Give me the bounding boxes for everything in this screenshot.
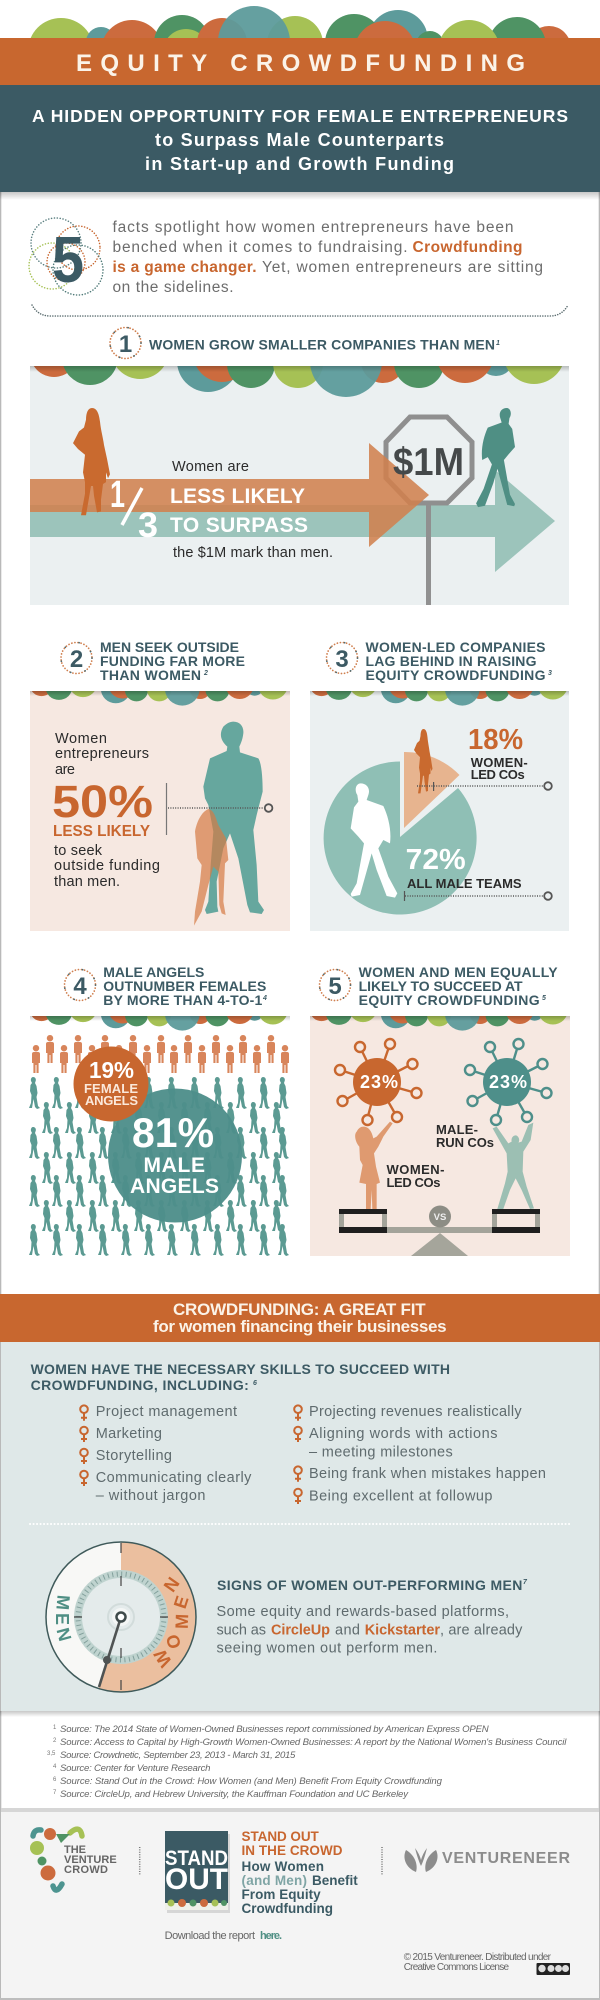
intro text: on the sidelines.	[112, 279, 234, 296]
subtitle banner: in Start-up and Growth Funding	[145, 154, 454, 174]
icon: man silhouette	[476, 408, 515, 507]
intro: five facts	[29, 218, 543, 296]
heading 5: LIKELY TO SUCCEED AT	[359, 978, 523, 994]
text: women entrepreneurs are: are	[55, 762, 75, 778]
stop sign outline	[386, 417, 472, 605]
text: women entrepreneurs are	[55, 731, 149, 778]
icon: orange burst 23 percent	[335, 1039, 422, 1125]
intro text: Yet, women entrepreneurs are sitting	[262, 259, 543, 276]
label: women: O	[162, 1632, 185, 1651]
icon: woman lifting	[355, 1122, 393, 1209]
logo: the venture crowd: CROWD	[64, 1864, 108, 1876]
label: women-led cos: LED COs	[471, 767, 525, 782]
number badge 5	[320, 970, 350, 1000]
number badge 3	[326, 642, 358, 674]
logo: the venture crowd	[30, 1828, 117, 1890]
text: to seek outside funding	[54, 843, 160, 890]
list: skills right column: Aligning words with actions	[309, 1426, 498, 1442]
heading 3: WOMEN-LED COMPANIES	[366, 639, 546, 655]
panel 3: women-led companies lag	[310, 670, 569, 931]
number badge 1	[110, 328, 141, 358]
circle: 81 percent male angels: 81%	[132, 1109, 214, 1156]
heading 3	[326, 639, 552, 683]
footnotes: Source: Center for Venture Research	[60, 1763, 210, 1774]
heading 2: FUNDING FAR MORE	[100, 653, 245, 669]
icon: small woman	[194, 809, 228, 926]
text: signs of out-performing: and	[335, 1622, 360, 1638]
heading 2: THAN WOMEN	[100, 667, 201, 683]
intro text: benched when it comes to fundraising.	[112, 239, 408, 256]
panel 1: smaller companies	[30, 366, 569, 605]
section banner: crowdfunding a great fit	[0, 1294, 600, 1342]
report title: Benefit	[312, 1873, 358, 1888]
copyright: © 2015 Ventureneer. Distributed under	[404, 1952, 552, 1963]
logo: the venture crowd: VENTURE	[64, 1854, 117, 1866]
subtitle banner: A HIDDEN OPPORTUNITY FOR FEMALE ENTREPRENEURS	[32, 106, 568, 126]
heading: necessary skills	[31, 1361, 450, 1393]
label: women: E	[170, 1593, 193, 1611]
heading 4	[64, 964, 267, 1008]
label: women: M	[172, 1614, 192, 1629]
balance scale: VS	[434, 1212, 446, 1223]
number badge 2: 2	[70, 646, 83, 673]
callout line 18	[417, 782, 552, 791]
number badge 2	[61, 642, 92, 674]
list: skills right column	[294, 1404, 546, 1505]
heading 2: MEN SEEK OUTSIDE	[100, 639, 239, 655]
subtitle banner	[0, 85, 600, 192]
logo: ventureneer	[404, 1848, 570, 1872]
text: signs of out-performing	[216, 1577, 528, 1657]
panel: skills and signs	[1, 1342, 599, 1711]
heading 5: 5	[542, 995, 546, 1002]
heading 1	[110, 328, 500, 358]
label: women: W	[150, 1646, 176, 1671]
label: male-run cos: MALE-	[436, 1122, 478, 1137]
text: signs of out-performing: seeing women out perform men.	[216, 1641, 437, 1657]
label: less likely: LESS LIKELY	[53, 823, 150, 840]
title banner: EQUITY CROWDFUNDING	[76, 50, 525, 77]
download link: here.	[260, 1930, 282, 1942]
panel 5: equally likely to succeed	[310, 995, 570, 1256]
footnotes: Source: Access to Capital by High-Growth Women-Owned Businesses: A report by the National Women's Business Council	[60, 1737, 567, 1748]
list: skills left column: Marketing	[96, 1426, 162, 1442]
stat: 18 percent: 18%	[468, 724, 523, 756]
balance scale	[339, 1206, 540, 1256]
footnotes: Source: Crowdnetic, September 23, 2013 - March 31, 2015	[60, 1750, 296, 1761]
circle: 81 percent male angels	[108, 1088, 242, 1222]
text: signs of out-performing: such as	[216, 1622, 266, 1638]
number badge 4	[64, 970, 96, 1000]
report cover	[165, 1831, 230, 1913]
arrow: orange	[30, 443, 429, 547]
text: women entrepreneurs are: Women	[55, 731, 107, 747]
text: signs of out-performing: 7	[523, 1579, 528, 1586]
label: $1M: $1M	[393, 441, 464, 484]
icon: orange burst 23 percent: 23%	[360, 1072, 398, 1092]
circle: 19 percent female angels: FEMALE	[84, 1081, 138, 1096]
footnotes: 7	[53, 1790, 57, 1796]
label: women-led cos: LED COs	[386, 1175, 440, 1190]
heading 5: WOMEN AND MEN EQUALLY	[359, 964, 558, 980]
report title	[242, 1829, 358, 1916]
number badge 4: 4	[73, 973, 87, 1000]
text: signs of out-performing: , are already	[440, 1622, 523, 1638]
text: women are less likely	[170, 459, 333, 561]
circle: 19 percent female angels	[74, 1046, 148, 1122]
text: signs of out-performing: CircleUp	[271, 1622, 330, 1638]
callout line 72	[404, 891, 552, 901]
logo: ventureneer: VENTURENEER	[442, 1850, 570, 1867]
text: women are less likely: Women are	[172, 459, 249, 475]
label: women-led cos: WOMEN-	[386, 1162, 444, 1177]
panel 2: men seek funding	[30, 670, 290, 931]
label: male-run cos	[436, 1122, 494, 1150]
icon: man lifting	[493, 1123, 534, 1209]
list: skills right column: Being excellent at followup	[309, 1489, 492, 1505]
list: skills left column: Storytelling	[96, 1448, 172, 1464]
logo: the venture crowd: THE	[64, 1844, 86, 1856]
label: men	[52, 1594, 75, 1643]
stat: 72 percent: 72%	[406, 844, 466, 876]
circle: 19 percent female angels: ANGELS	[85, 1093, 138, 1108]
heading 3: EQUITY CROWDFUNDING	[366, 667, 546, 683]
label: women: N	[160, 1573, 184, 1596]
section banner: crowdfunding a great fit: CROWDFUNDING: A GREAT FIT	[173, 1300, 426, 1319]
callout line	[166, 783, 272, 835]
title banner	[0, 38, 600, 85]
label: women-led cos	[386, 1162, 444, 1190]
footer band	[0, 1808, 600, 2000]
list: skills right column: Being frank when mistakes happen	[309, 1466, 546, 1482]
footnotes: 4	[53, 1764, 57, 1770]
icon: dotted circles with 5: 5	[52, 223, 84, 296]
footnotes: 6	[53, 1777, 57, 1783]
label: men: E	[52, 1613, 72, 1625]
report title: STAND OUT	[242, 1829, 320, 1844]
heading 4: 4	[262, 995, 267, 1002]
teal figures grid	[29, 1077, 289, 1256]
icon: teal burst 23 percent: 23%	[489, 1072, 527, 1092]
heading 3: 3	[548, 670, 552, 677]
report cover: STAND	[165, 1847, 228, 1870]
circle: 81 percent male angels: MALE	[144, 1154, 205, 1177]
footnotes: Source: The 2014 State of Women-Owned Businesses report commissioned by American Express OPEN	[60, 1724, 489, 1735]
heading 4: OUTNUMBER FEMALES	[103, 978, 266, 994]
label: men: M	[52, 1594, 74, 1611]
text: women entrepreneurs are: entrepreneurs	[55, 746, 149, 762]
gauge needle	[99, 1612, 126, 1687]
icon: creative commons badge	[536, 1963, 570, 1975]
icon: tall man	[203, 722, 264, 914]
footnotes: 2	[53, 1738, 57, 1744]
text: to seek outside funding: outside funding	[54, 858, 160, 874]
number badge 3: 3	[335, 646, 349, 673]
orange figures row	[32, 1035, 289, 1073]
icon: teal burst 23 percent	[465, 1039, 552, 1125]
icon: white man	[351, 783, 397, 898]
icon: woman silhouette	[73, 408, 110, 515]
report title: From Equity	[242, 1887, 321, 1902]
report cover: OUT	[165, 1863, 228, 1896]
label: women	[150, 1573, 193, 1671]
heading: necessary skills: CROWDFUNDING, INCLUDING:	[31, 1377, 249, 1393]
footnotes: Source: CircleUp, and Hebrew University, the Kauffman Foundation and UC Berkeley	[60, 1789, 409, 1800]
intro text: facts spotlight how women entrepreneurs have been	[112, 219, 514, 236]
heading 5	[320, 964, 558, 1008]
label: men: N	[52, 1626, 75, 1643]
list: skills left column: Communicating clearly	[96, 1470, 252, 1486]
list: skills left column	[80, 1404, 252, 1504]
text: to seek outside funding: than men.	[54, 874, 120, 890]
text: women are less likely: the $1M mark than men.	[173, 545, 333, 561]
intro text: Crowdfunding	[412, 239, 522, 256]
subtitle banner: to Surpass Male Counterparts	[155, 130, 444, 150]
heading: necessary skills: WOMEN HAVE THE NECESSARY SKILLS TO SUCCEED WITH	[31, 1361, 450, 1377]
list: skills left column: – without jargon	[96, 1488, 206, 1504]
footnotes: 3,5	[47, 1751, 56, 1757]
heading 3: LAG BEHIND IN RAISING	[366, 653, 537, 669]
intro text	[112, 219, 543, 296]
list: skills right column: Projecting revenues realistically	[309, 1404, 522, 1420]
text: women are less likely: TO SURPASS	[170, 514, 308, 537]
fraction one third	[110, 474, 158, 545]
circle: 19 percent female angels: 19%	[89, 1057, 134, 1083]
label: all male teams: ALL MALE TEAMS	[407, 876, 522, 891]
footnotes	[47, 1724, 567, 1800]
gauge: women versus men	[46, 1542, 196, 1692]
panel 4: male angels outnumber	[29, 995, 290, 1256]
text: signs of out-performing: Some equity and rewards-based platforms,	[216, 1604, 509, 1620]
report title: How Women	[242, 1859, 324, 1874]
copyright	[404, 1952, 552, 1973]
icon: dotted circles with 5	[29, 218, 103, 296]
heading 1: WOMEN GROW SMALLER COMPANIES THAN MEN	[149, 336, 495, 352]
fraction one third: 1	[110, 474, 125, 516]
stat: 50 percent: 50%	[52, 776, 153, 827]
heading 5: EQUITY CROWDFUNDING	[359, 992, 540, 1008]
label: women-led cos	[471, 755, 528, 782]
intro text: is a game changer.	[112, 259, 256, 276]
arrow: teal	[30, 470, 555, 572]
report title: (and Men)	[242, 1873, 307, 1888]
section banner: crowdfunding a great fit: for women financing their businesses	[153, 1317, 447, 1336]
heading 4: BY MORE THAN 4-TO-1	[103, 992, 263, 1008]
number badge 1: 1	[119, 331, 132, 358]
heading 2: 2	[203, 670, 208, 677]
text: signs of out-performing: Kickstarter	[365, 1622, 440, 1638]
copyright: Creative Commons License	[404, 1962, 509, 1973]
text: to seek outside funding: to seek	[54, 843, 103, 859]
heading 1: 1	[496, 340, 500, 347]
heading 2	[61, 639, 245, 683]
footnotes: 1	[53, 1725, 57, 1731]
label: women-led cos: WOMEN-	[471, 755, 528, 770]
label: male-run cos: RUN COs	[436, 1135, 494, 1150]
fraction one third: 3	[138, 506, 158, 545]
footnotes: Source: Stand Out in the Crowd: How Women (and Men) Benefit From Equity Crowdfunding	[60, 1776, 443, 1787]
icon: small woman	[414, 729, 432, 793]
pie chart	[324, 752, 477, 914]
list: skills right column: – meeting milestones	[309, 1445, 453, 1461]
report title: IN THE CROWD	[242, 1843, 343, 1858]
report title: Crowdfunding	[242, 1901, 333, 1916]
circle: 81 percent male angels: ANGELS	[130, 1175, 219, 1198]
top scallop decoration	[30, 6, 568, 38]
heading 4: MALE ANGELS	[103, 964, 204, 980]
heading: necessary skills: 6	[253, 1380, 257, 1387]
download link: Download the report	[165, 1930, 255, 1942]
text: women are less likely: LESS LIKELY	[170, 485, 305, 508]
number badge 5: 5	[328, 973, 342, 1000]
list: skills left column: Project management	[96, 1404, 237, 1420]
text: signs of out-performing: SIGNS OF WOMEN OUT-PERFORMING MEN	[217, 1577, 522, 1593]
